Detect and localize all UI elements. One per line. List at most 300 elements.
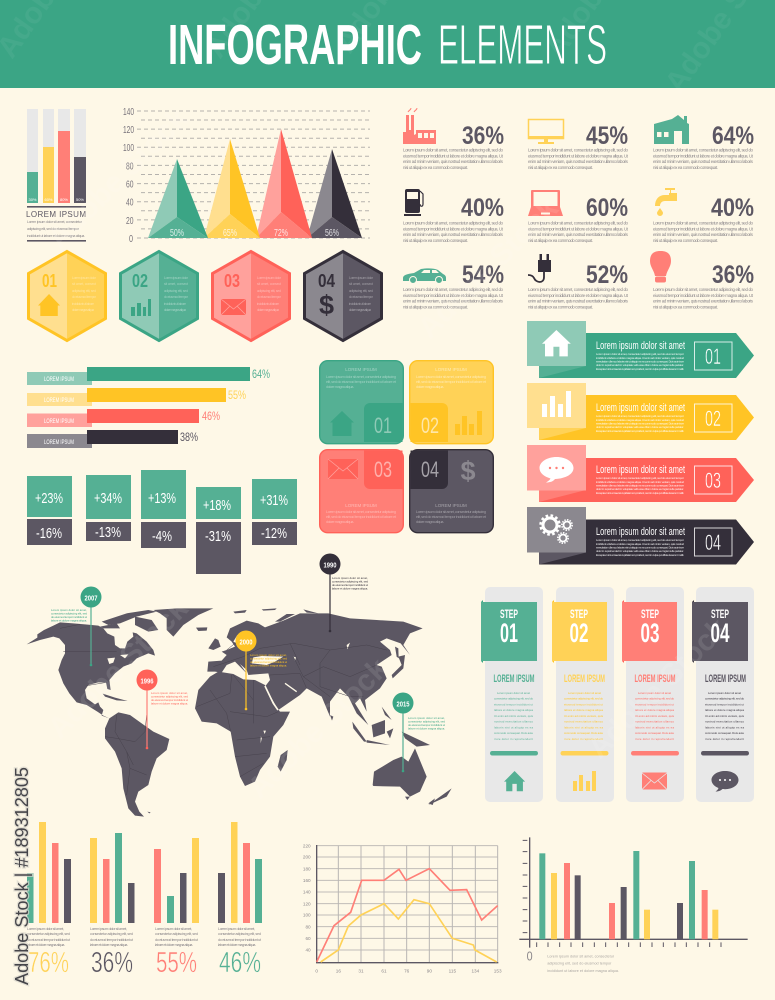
stat: monitor 45% bbox=[528, 120, 629, 170]
bottom bar group 1 bbox=[27, 822, 71, 979]
pyramid chart: 20 bbox=[126, 216, 134, 227]
hexagon 03: Lorem ipsum dolor bbox=[257, 276, 282, 280]
bottom bar group 3: 55% bbox=[156, 947, 197, 979]
bottom bar group 3: do eiusmod tempor incididunt ut bbox=[155, 938, 199, 942]
hexagon 04: 04 bbox=[318, 271, 335, 291]
tile 01 green: 01 bbox=[374, 413, 392, 438]
stat: laptop 60%: eiusmod tempor incididunt ut labore et dolore magna aliqua. Ut bbox=[528, 226, 629, 232]
step card 01: Lorem ipsum dolor sit amet bbox=[497, 691, 530, 695]
step card 03 bbox=[622, 587, 684, 802]
map pin 2000: consectetur adipiscing elit, sed bbox=[250, 656, 287, 660]
step card 03: Lorem ipsum dolor sit amet bbox=[638, 691, 671, 695]
map pin 2015: do eiusmod tempor incididunt ut bbox=[408, 723, 445, 727]
stat: fuel pump 40%: enim ad minim veniam, quis nostrud exercitation ullamco laboris bbox=[403, 232, 504, 237]
map pin 2007: labore et dolore magna aliqua. bbox=[51, 618, 87, 622]
step card 01: irure dolor in reprehenderit bbox=[494, 737, 533, 741]
bottom bar group 1: Lorem ipsum dolor sit amet, bbox=[27, 927, 64, 931]
map pin 2007: do eiusmod tempor incididunt ut bbox=[51, 615, 87, 619]
map pin 1996: 1996 bbox=[140, 676, 154, 686]
stat: car 54%: eiusmod tempor incididunt ut labore et dolore magna aliqua. Ut bbox=[403, 293, 504, 298]
arrow banner 02: Excepteur sint occaecat cupidatat non proident, sunt in culpa qui officia deserunt mollit. bbox=[596, 429, 684, 433]
stat: water tap 40% bbox=[653, 188, 754, 243]
arrow banner 04: dolor in reprehenderit in voluptate velit esse cillum dolore eu fugiat nulla pariatur. bbox=[596, 549, 684, 553]
arrow banner 04: 04 bbox=[705, 530, 721, 555]
tile 04 dark: Lorem ipsum dolor sit amet, consectetur adipiscing bbox=[416, 510, 486, 514]
line chart: 160 bbox=[303, 878, 311, 883]
step card 01: nostrud exercitation ullamco bbox=[494, 720, 533, 724]
tile 02 yellow: Lorem ipsum dolor sit amet, consectetur adipiscing bbox=[416, 375, 486, 379]
step card 04: Lorem ipsum dolor sit amet bbox=[708, 691, 741, 695]
hexagon 04: $ bbox=[319, 290, 334, 320]
plus minus columns: -13% bbox=[95, 524, 121, 541]
step card 01 bbox=[481, 587, 543, 802]
hexagon 02: dolore magna aliqua bbox=[164, 308, 186, 312]
stacked percent bars panel: 60% bbox=[44, 197, 53, 202]
map pin 1996: Lorem ipsum dolor sit amet, bbox=[151, 691, 188, 695]
stat: water tap 40%: enim ad minim veniam, quis nostrud exercitation ullamco laboris bbox=[653, 232, 754, 237]
hexagon 02: sit amet, consect bbox=[164, 282, 188, 286]
arrow banner 02: incididunt ut labore et dolore magna aliqua. Ut enim ad minim veniam, quis nostrud bbox=[596, 418, 684, 422]
bottom bar group 2 bbox=[90, 833, 134, 979]
bottom bar group 4: labore et dolore magna aliqua. bbox=[218, 943, 256, 947]
hexagon 04: do eiusmod tempor bbox=[349, 295, 374, 299]
step card 04 bbox=[692, 587, 754, 802]
arrow banner 01: Excepteur sint occaecat cupidatat non proident, sunt in culpa qui officia deserunt mollit. bbox=[596, 367, 684, 371]
step card 02 bbox=[552, 587, 614, 802]
arrow banner 01: Lorem ipsum dolor sit amet, consectetur adipiscing elit, sed do eiusmod tempor bbox=[596, 352, 684, 356]
stat: car 54%: nisi ut aliquip ex ea commodo consequat. bbox=[403, 304, 468, 310]
arrow banner 02: Lorem ipsum dolor sit amet, consectetur adipiscing elit, sed do eiusmod tempor bbox=[596, 414, 684, 418]
arrow banner 04: Excepteur sint occaecat cupidatat non proident, sunt in culpa qui officia deserunt mollit. bbox=[596, 553, 684, 557]
stat: house 64%: eiusmod tempor incididunt ut labore et dolore magna aliqua. Ut bbox=[653, 154, 754, 158]
stat: house 64%: enim ad minim veniam, quis nostrud exercitation ullamco laboris bbox=[653, 159, 754, 164]
line chart bbox=[303, 843, 502, 973]
line chart: 61 bbox=[381, 968, 387, 973]
step card 01: laboris nisi ut aliquip ex ea bbox=[494, 726, 533, 730]
stat: light bulb 36% bbox=[650, 251, 754, 310]
hexagon 03: adipiscing elit, sed bbox=[257, 289, 281, 293]
map pin 2000: 2000 bbox=[240, 638, 252, 646]
step card 03: commodo consequat. Duis aute bbox=[635, 731, 674, 735]
line chart: 153 bbox=[494, 968, 502, 973]
hexagon 03: dolore magna aliqua bbox=[257, 308, 279, 312]
step card 03: consectetur adipiscing elit, sed do bbox=[635, 696, 674, 700]
map pin 2015: Lorem ipsum dolor sit amet, bbox=[408, 716, 445, 720]
step card 03: labore et dolore magna aliqua bbox=[635, 708, 674, 712]
stat: water tap 40%: nisi ut aliquip ex ea commodo consequat. bbox=[653, 238, 718, 243]
tile 02 yellow: LOREM IPSUM bbox=[435, 367, 467, 372]
tile 04 dark: 04 bbox=[421, 457, 439, 482]
right bar chart: adipiscing elit, sed do eiusmod tempor bbox=[547, 962, 612, 966]
arrow banner 01: Lorem ipsum dolor sit amet bbox=[596, 340, 685, 352]
pyramid: dark 56% bbox=[307, 149, 362, 239]
bottom bar group 4: do eiusmod tempor incididunt ut bbox=[218, 938, 262, 942]
bottom bar group 2: Lorem ipsum dolor sit amet, bbox=[90, 927, 127, 931]
stat: plug 52%: eiusmod tempor incididunt ut labore et dolore magna aliqua. Ut bbox=[528, 293, 629, 298]
stat: fuel pump 40%: 40% bbox=[461, 194, 504, 222]
tile 04 dark: elit, sed do eiusmod tempor incididunt ut labore et bbox=[416, 515, 487, 519]
map pin 2000 bbox=[236, 630, 287, 710]
step card 01: commodo consequat. Duis aute bbox=[494, 731, 533, 735]
step card 02: Ut enim ad minim veniam, quis bbox=[564, 714, 604, 718]
step card 01: LOREM IPSUM bbox=[494, 673, 534, 685]
line chart: 90 bbox=[427, 968, 432, 973]
stat: laptop 60%: 60% bbox=[586, 194, 628, 222]
map pin 2015 bbox=[392, 692, 445, 772]
bottom bar group 3: Lorem ipsum dolor sit amet, bbox=[155, 927, 192, 931]
stat: monitor 45%: 45% bbox=[586, 122, 628, 150]
step card 03: laboris nisi ut aliquip ex ea bbox=[635, 726, 674, 730]
pyramid: green 50% bbox=[148, 159, 208, 239]
line chart: 80 bbox=[305, 924, 311, 929]
arrow banner 02: exercitation ullamco laboris nisi ut aliquip ex ea commodo consequat. Duis aute irure bbox=[596, 422, 684, 426]
arrow banner 03: dolor in reprehenderit in voluptate velit esse cillum dolore eu fugiat nulla pariatur. bbox=[596, 487, 684, 491]
step card 02: eiusmod tempor incididunt ut bbox=[564, 702, 603, 706]
bottom bar group 1: labore et dolore magna aliqua. bbox=[27, 943, 65, 947]
step card 03: nostrud exercitation ullamco bbox=[635, 720, 674, 724]
header banner bbox=[0, 0, 775, 88]
tile 04 dark bbox=[410, 450, 493, 533]
tile 02 yellow bbox=[410, 361, 493, 444]
step card 01: eiusmod tempor incididunt ut bbox=[494, 702, 533, 706]
map pin 2007 bbox=[51, 586, 102, 666]
stacked percent bars panel bbox=[26, 109, 86, 242]
tile 02 yellow: dolore magna aliqua. bbox=[416, 385, 444, 389]
plus minus columns: -12% bbox=[261, 525, 287, 542]
tile 04 dark: $ bbox=[460, 456, 476, 486]
arrow banner 04: exercitation ullamco laboris nisi ut aliquip ex ea commodo consequat. Duis aute irure bbox=[596, 546, 684, 550]
line chart: 0 bbox=[315, 968, 318, 973]
map pin 1990: consectetur adipiscing elit, sed bbox=[332, 580, 368, 584]
stacked percent bars panel: 80% bbox=[60, 197, 68, 202]
arrow banner 02: Lorem ipsum dolor sit amet bbox=[596, 402, 685, 414]
stat: factory 36%: eiusmod tempor incididunt ut labore et dolore magna aliqua. Ut bbox=[403, 154, 504, 158]
horizontal bars: 38% bbox=[180, 430, 198, 444]
plus minus columns: +34% bbox=[94, 490, 122, 507]
tile 02 yellow: 02 bbox=[421, 413, 439, 438]
hexagon 01: dolore magna aliqua bbox=[72, 308, 94, 312]
hexagon 03: incididunt ut labore bbox=[257, 302, 279, 306]
arrow banner 02: dolor in reprehenderit in voluptate velit esse cillum dolore eu fugiat nulla pariatur. bbox=[596, 425, 684, 429]
world map bbox=[27, 608, 452, 817]
pyramid: red 72% bbox=[256, 129, 312, 239]
line chart: 120 bbox=[303, 901, 311, 906]
stat: laptop 60%: Lorem ipsum dolor sit amet, consectetur adipiscing elit, sed do bbox=[528, 220, 629, 226]
arrow banner 03: Lorem ipsum dolor sit amet, consectetur adipiscing elit, sed do eiusmod tempor bbox=[596, 476, 684, 480]
arrow banner 02: 02 bbox=[705, 406, 721, 431]
hexagon 01: 01 bbox=[42, 271, 57, 291]
step card 04: Ut enim ad minim veniam, quis bbox=[705, 714, 745, 718]
line chart: 31 bbox=[358, 968, 364, 973]
horizontal bars: LOREM IPSUM bbox=[44, 419, 74, 425]
plus minus columns: +13% bbox=[148, 490, 176, 507]
tile 03 red: 03 bbox=[374, 457, 392, 482]
faint diagonal stock watermark: Adobe Stock bbox=[582, 612, 735, 765]
stat: light bulb 36%: nisi ut aliquip ex ea commodo consequat. bbox=[653, 304, 718, 310]
bottom bar group 4 bbox=[218, 822, 262, 979]
step card 04: irure dolor in reprehenderit bbox=[705, 737, 744, 741]
map pin 1996: do eiusmod tempor incididunt ut bbox=[151, 698, 188, 702]
map pin 1990: do eiusmod tempor incididunt ut bbox=[332, 583, 368, 587]
step card 01: labore et dolore magna aliqua bbox=[494, 708, 533, 712]
hexagon 03: do eiusmod tempor bbox=[257, 295, 282, 299]
step card 04: consectetur adipiscing elit, sed do bbox=[705, 696, 744, 700]
step card 01: 01 bbox=[500, 618, 518, 648]
step card 03: Ut enim ad minim veniam, quis bbox=[635, 714, 675, 718]
step card 04: laboris nisi ut aliquip ex ea bbox=[705, 726, 744, 730]
map pin 1990: 1990 bbox=[324, 560, 336, 570]
tile 03 red bbox=[320, 450, 403, 533]
hexagon 04 bbox=[304, 250, 382, 342]
step card 04: labore et dolore magna aliqua bbox=[705, 708, 744, 712]
hexagon 01: incididunt ut labore bbox=[72, 302, 94, 306]
hexagon 02: 02 bbox=[132, 271, 148, 291]
map pin 2007: 2007 bbox=[84, 594, 98, 602]
hexagon 04: Lorem ipsum dolor bbox=[349, 276, 374, 280]
hexagon 01 bbox=[28, 250, 106, 342]
pyramid chart: 100 bbox=[123, 143, 134, 154]
step card 02: commodo consequat. Duis aute bbox=[564, 731, 603, 735]
stat: monitor 45%: enim ad minim veniam, quis nostrud exercitation ullamco laboris bbox=[528, 159, 629, 164]
stat: light bulb 36%: 36% bbox=[712, 261, 754, 289]
stat: water tap 40%: 40% bbox=[711, 194, 754, 222]
arrow banner 01: incididunt ut labore et dolore magna aliqua. Ut enim ad minim veniam, quis nostrud bbox=[596, 356, 684, 360]
pyramid chart: 80 bbox=[126, 162, 134, 172]
faint diagonal stock watermark: Adobe Stock bbox=[242, 652, 395, 805]
step card 03: LOREM IPSUM bbox=[634, 673, 676, 685]
hexagon 02: adipiscing elit, sed bbox=[164, 289, 188, 293]
step card 02: labore et dolore magna aliqua bbox=[564, 708, 603, 712]
line chart: 100 bbox=[303, 913, 311, 918]
arrow banner 01: dolor in reprehenderit in voluptate velit esse cillum dolore eu fugiat nulla pariatur. bbox=[596, 363, 684, 367]
header banner: INFOGRAPHIC bbox=[168, 13, 422, 77]
bottom bar group 1: 76% bbox=[28, 947, 69, 979]
arrow banner 03: Lorem ipsum dolor sit amet bbox=[596, 464, 685, 476]
pyramid: yellow 65%: 65% bbox=[223, 228, 237, 239]
tile 02 yellow: elit, sed do eiusmod tempor incididunt ut labore et bbox=[416, 380, 487, 384]
line chart: 140 bbox=[303, 890, 311, 895]
stat: water tap 40%: eiusmod tempor incididunt ut labore et dolore magna aliqua. Ut bbox=[653, 226, 754, 232]
map pin 2000: labore et dolore magna aliqua. bbox=[250, 664, 287, 668]
stat: house 64%: Lorem ipsum dolor sit amet, consectetur adipiscing elit, sed do bbox=[653, 148, 754, 152]
hexagon 02: incididunt ut labore bbox=[164, 302, 186, 306]
hexagon 02: Lorem ipsum dolor bbox=[164, 276, 189, 280]
hexagon 03 bbox=[212, 250, 290, 342]
arrow banner 04 bbox=[527, 507, 754, 564]
horizontal bars bbox=[27, 367, 270, 448]
hexagon 01: sit amet, consect bbox=[72, 282, 96, 286]
stat: monitor 45%: Lorem ipsum dolor sit amet, consectetur adipiscing elit, sed do bbox=[528, 148, 629, 152]
hexagon 01: do eiusmod tempor bbox=[72, 295, 97, 299]
line chart: 60 bbox=[305, 936, 311, 941]
pyramid chart bbox=[123, 107, 370, 245]
step card 02: 02 bbox=[570, 618, 588, 648]
hexagon 02: do eiusmod tempor bbox=[164, 295, 189, 299]
bottom bar group 3 bbox=[154, 838, 199, 979]
hexagon 04: incididunt ut labore bbox=[349, 302, 371, 306]
map pin 2007: consectetur adipiscing elit, sed bbox=[51, 612, 87, 616]
arrow banner 03: incididunt ut labore et dolore magna aliqua. Ut enim ad minim veniam, quis nostrud bbox=[596, 480, 684, 484]
arrow banner 01: 01 bbox=[705, 344, 721, 369]
map pin 1990 bbox=[320, 554, 368, 632]
step card 04: 04 bbox=[710, 618, 730, 648]
stat: light bulb 36%: eiusmod tempor incididunt ut labore et dolore magna aliqua. Ut bbox=[653, 293, 754, 298]
stacked percent bars panel: LOREM IPSUM bbox=[26, 210, 86, 219]
pyramid chart: 0 bbox=[129, 234, 133, 245]
plus minus columns: -4% bbox=[152, 528, 172, 545]
pyramid chart: 120 bbox=[123, 125, 134, 136]
tile 01 green: Lorem ipsum dolor sit amet, consectetur adipiscing bbox=[326, 375, 396, 379]
stat: water tap 40%: Lorem ipsum dolor sit amet, consectetur adipiscing elit, sed do bbox=[653, 220, 754, 226]
tile 01 green bbox=[320, 361, 403, 444]
bottom bar group 2: do eiusmod tempor incididunt ut bbox=[90, 938, 134, 942]
line chart: 16 bbox=[336, 968, 341, 973]
stacked percent bars panel: Lorem ipsum dolor sit amet, consectetur bbox=[27, 220, 83, 224]
stat: plug 52%: nisi ut aliquip ex ea commodo consequat. bbox=[528, 304, 593, 310]
hexagon 03: sit amet, consect bbox=[257, 282, 281, 286]
map pin 1996: consectetur adipiscing elit, sed bbox=[151, 694, 188, 698]
step card 01: STEP bbox=[500, 609, 518, 621]
arrow banner 02 bbox=[527, 383, 754, 440]
horizontal bars: 46% bbox=[202, 409, 220, 423]
stat: car 54%: Lorem ipsum dolor sit amet, consectetur adipiscing elit, sed do bbox=[403, 287, 504, 292]
horizontal bars: LOREM IPSUM bbox=[44, 398, 74, 404]
step card 02: laboris nisi ut aliquip ex ea bbox=[564, 726, 603, 730]
arrow banner 04: incididunt ut labore et dolore magna aliqua. Ut enim ad minim veniam, quis nostrud bbox=[596, 542, 684, 546]
hexagon 01: Lorem ipsum dolor bbox=[72, 276, 97, 280]
stat: laptop 60%: nisi ut aliquip ex ea commodo consequat. bbox=[528, 238, 593, 243]
line chart: 220 bbox=[303, 843, 311, 848]
step card 03: STEP bbox=[641, 609, 659, 621]
line chart: 115 bbox=[449, 968, 456, 973]
step card 03: 03 bbox=[640, 618, 660, 648]
stat: house 64%: 64% bbox=[712, 122, 754, 150]
bottom bar group 2: 36% bbox=[91, 947, 133, 979]
map pin 1996: labore et dolore magna aliqua. bbox=[151, 702, 188, 706]
pyramid chart: 140 bbox=[123, 107, 134, 118]
bottom bar group 4: Lorem ipsum dolor sit amet, bbox=[218, 927, 255, 931]
stat: house 64%: nisi ut aliquip ex ea commodo consequat. bbox=[653, 165, 718, 170]
plus minus columns bbox=[27, 470, 297, 574]
tile 01 green: elit, sed do eiusmod tempor incididunt ut labore et bbox=[326, 380, 397, 384]
stat: house 64% bbox=[653, 115, 754, 170]
map pin 2015: consectetur adipiscing elit, sed bbox=[408, 720, 445, 724]
right bar chart bbox=[519, 837, 748, 973]
arrow banner 04: Lorem ipsum dolor sit amet bbox=[596, 526, 685, 538]
line chart: 134 bbox=[471, 968, 480, 973]
plus minus columns: +31% bbox=[260, 492, 288, 509]
step card 02: Lorem ipsum dolor sit amet bbox=[568, 691, 601, 695]
bottom bar group 4: consectetur adipiscing elit, sed bbox=[218, 932, 261, 936]
arrow banner 03: Excepteur sint occaecat cupidatat non proident, sunt in culpa qui officia deserunt mollit. bbox=[596, 491, 684, 495]
stat: plug 52% bbox=[528, 254, 629, 310]
pyramid: yellow 65% bbox=[204, 139, 260, 239]
stat: factory 36%: 36% bbox=[462, 122, 504, 150]
right bar chart: Lorem ipsum dolor sit amet, consectetur bbox=[547, 954, 615, 958]
tile 01 green: LOREM IPSUM bbox=[345, 367, 377, 372]
stat: laptop 60%: enim ad minim veniam, quis nostrud exercitation ullamco laboris bbox=[528, 232, 629, 237]
faint diagonal stock watermark: Adobe Stock bbox=[42, 592, 195, 745]
pyramid: dark 56%: 56% bbox=[325, 228, 339, 239]
plus minus columns: -16% bbox=[36, 525, 62, 542]
arrow banner 03: 03 bbox=[705, 468, 721, 493]
stat: car 54%: 54% bbox=[462, 261, 504, 289]
tile 03 red: elit, sed do eiusmod tempor incididunt ut labore et bbox=[326, 515, 397, 519]
map pin 1996 bbox=[136, 670, 188, 749]
pyramid: green 50%: 50% bbox=[170, 228, 184, 239]
map pin 2007: Lorem ipsum dolor sit amet, bbox=[51, 608, 87, 612]
step card 04: nostrud exercitation ullamco bbox=[705, 720, 744, 724]
stat: light bulb 36%: Lorem ipsum dolor sit amet, consectetur adipiscing elit, sed do bbox=[653, 287, 754, 292]
map: Europe, Africa, Asia, Oceania bbox=[195, 608, 435, 805]
line chart: 40 bbox=[305, 948, 311, 953]
arrow banner 01 bbox=[527, 321, 754, 378]
stat: fuel pump 40%: Lorem ipsum dolor sit amet, consectetur adipiscing elit, sed do bbox=[403, 220, 504, 226]
map pin 2000: do eiusmod tempor incididunt ut bbox=[250, 660, 287, 664]
stat: monitor 45%: eiusmod tempor incididunt ut labore et dolore magna aliqua. Ut bbox=[528, 154, 629, 158]
step card 02: consectetur adipiscing elit, sed do bbox=[564, 696, 603, 700]
stat: fuel pump 40% bbox=[403, 189, 504, 243]
map pin 1990: labore et dolore magna aliqua. bbox=[332, 586, 368, 590]
bottom bar group 2: consectetur adipiscing elit, sed bbox=[90, 932, 133, 936]
bottom bar group 4: 46% bbox=[219, 947, 261, 979]
step card 02: LOREM IPSUM bbox=[564, 673, 605, 685]
faint diagonal stock watermark: Adobe Stock bbox=[42, 102, 195, 255]
stock watermark id: Adobe Stock | #189312805 bbox=[12, 767, 32, 985]
map pin 2000: Lorem ipsum dolor sit amet, bbox=[250, 653, 287, 657]
pyramid: red 72%: 72% bbox=[274, 228, 288, 239]
arrow banner 01: exercitation ullamco laboris nisi ut aliquip ex ea commodo consequat. Duis aute irure bbox=[596, 360, 684, 364]
plus minus columns: +23% bbox=[35, 490, 63, 507]
arrow banner 04: Lorem ipsum dolor sit amet, consectetur adipiscing elit, sed do eiusmod tempor bbox=[596, 538, 684, 542]
step card 02: irure dolor in reprehenderit bbox=[564, 737, 603, 741]
right bar chart: 0 bbox=[527, 949, 533, 964]
header banner: ELEMENTS bbox=[438, 13, 607, 77]
stat: plug 52%: enim ad minim veniam, quis nostrud exercitation ullamco laboris bbox=[528, 298, 629, 304]
hexagon 03: 03 bbox=[224, 271, 240, 291]
stat: factory 36%: enim ad minim veniam, quis nostrud exercitation ullamco laboris bbox=[403, 159, 504, 164]
step card 02: nostrud exercitation ullamco bbox=[564, 720, 603, 724]
faint diagonal stock watermark: Adobe Stock bbox=[412, 192, 565, 345]
stat: light bulb 36%: enim ad minim veniam, quis nostrud exercitation ullamco laboris bbox=[653, 298, 754, 304]
hexagon 04: adipiscing elit, sed bbox=[349, 289, 373, 293]
map pin 2015: 2015 bbox=[396, 700, 410, 708]
stacked percent bars panel: adipiscing elit, sed do eiusmod tempor bbox=[27, 227, 80, 231]
stacked percent bars panel: 30% bbox=[28, 197, 37, 202]
tile 01 green: dolore magna aliqua. bbox=[326, 385, 354, 389]
stat: plug 52%: 52% bbox=[586, 261, 628, 289]
tile 03 red: dolore magna aliqua. bbox=[326, 520, 354, 524]
stat: factory 36%: Lorem ipsum dolor sit amet, consectetur adipiscing elit, sed do bbox=[403, 148, 504, 152]
step card 03: irure dolor in reprehenderit bbox=[635, 737, 674, 741]
plus minus columns: -31% bbox=[205, 528, 231, 545]
arrow banner 03 bbox=[527, 445, 754, 502]
bottom bar group 1: consectetur adipiscing elit, sed bbox=[27, 932, 70, 936]
bottom bar group 2: labore et dolore magna aliqua. bbox=[90, 943, 128, 947]
step card 04: STEP bbox=[711, 609, 729, 621]
map: Americas bbox=[27, 608, 213, 817]
horizontal bars: 55% bbox=[228, 388, 246, 402]
stat: car 54%: enim ad minim veniam, quis nostrud exercitation ullamco laboris bbox=[403, 298, 504, 304]
bottom bar group 3: consectetur adipiscing elit, sed bbox=[155, 932, 198, 936]
stat: factory 36% bbox=[403, 108, 504, 170]
map pin 2015: labore et dolore magna aliqua. bbox=[408, 726, 445, 730]
stacked percent bars panel: incididunt ut labore et dolore magna aliqua. bbox=[27, 234, 85, 238]
stat: monitor 45%: nisi ut aliquip ex ea commodo consequat. bbox=[528, 165, 593, 170]
step card 01: Ut enim ad minim veniam, quis bbox=[494, 714, 534, 718]
stat: fuel pump 40%: eiusmod tempor incididunt ut labore et dolore magna aliqua. Ut bbox=[403, 226, 504, 232]
pyramid chart: 60 bbox=[126, 180, 134, 190]
